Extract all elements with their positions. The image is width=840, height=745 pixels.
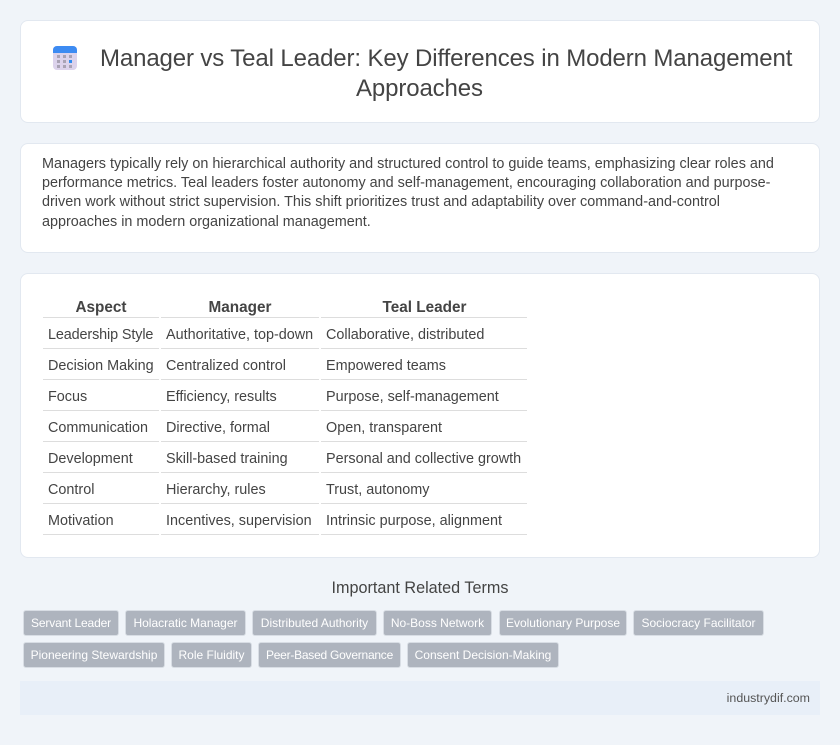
tags: Servant Leader [31, 616, 111, 630]
tags: Holacratic Manager [133, 616, 238, 630]
tags: Distributed Authority [261, 616, 368, 630]
title: Manager vs Teal Leader: Key Differences in Modern Management [100, 45, 792, 72]
panel: comparison table card [20, 273, 820, 558]
panel: intro card [20, 143, 820, 253]
title [100, 45, 792, 102]
tags: Consent Decision-Making [415, 648, 551, 662]
footer bar [20, 681, 820, 715]
table rows: Incentives, supervision [166, 513, 312, 529]
table rows: Open, transparent [326, 420, 442, 436]
tags: Evolutionary Purpose [506, 616, 620, 630]
intro text: Managers typically rely on hierarchical authority and structured control to guide teams, emphasizing clear roles and [42, 156, 774, 172]
table headers: Aspect [75, 299, 126, 316]
table headers: Manager [209, 299, 271, 316]
table rows: Motivation [48, 513, 114, 529]
intro text: approaches in modern organizational management. [42, 214, 371, 230]
tags: Pioneering Stewardship [31, 648, 157, 662]
table headers: Teal Leader [383, 299, 466, 316]
table rows: Development [48, 451, 133, 467]
table rows: Control [48, 482, 94, 498]
table rows: Trust, autonomy [326, 482, 429, 498]
intro text [42, 156, 774, 230]
tags: No-Boss Network [391, 616, 484, 630]
table rows: Hierarchy, rules [166, 482, 266, 498]
table headers [43, 299, 527, 535]
table rows: Centralized control [166, 358, 286, 374]
table rows: Empowered teams [326, 358, 446, 374]
table rows: Focus [48, 389, 87, 405]
intro text: performance metrics. Teal leaders foster autonomy and self-management, encouraging collaboration and purpose- [42, 175, 770, 191]
footer source text: industrydif.com [727, 691, 810, 705]
panel: title card [20, 20, 820, 123]
tags [23, 610, 764, 668]
table rows: Skill-based training [166, 451, 288, 467]
table rows: Leadership Style [48, 327, 153, 343]
table rows [48, 327, 521, 529]
intro text: driven work without strict supervision. This shift prioritizes trust and adaptability over command-and-control [42, 194, 720, 210]
table rows: Purpose, self-management [326, 389, 499, 405]
tags: Role Fluidity [178, 648, 245, 662]
related terms heading: Important Related Terms [332, 579, 508, 597]
title: Approaches [356, 74, 483, 102]
tags: Sociocracy Facilitator [641, 616, 756, 630]
icon: calendar [53, 46, 77, 70]
table rows: Collaborative, distributed [326, 327, 484, 343]
table rows: Communication [48, 420, 148, 436]
table rows: Intrinsic purpose, alignment [326, 513, 502, 529]
table rows: Personal and collective growth [326, 451, 521, 467]
tags: Peer-Based Governance [266, 648, 393, 662]
table rows: Directive, formal [166, 420, 270, 436]
table rows: Decision Making [48, 358, 154, 374]
table rows: Efficiency, results [166, 389, 277, 405]
table rows: Authoritative, top-down [166, 327, 313, 343]
